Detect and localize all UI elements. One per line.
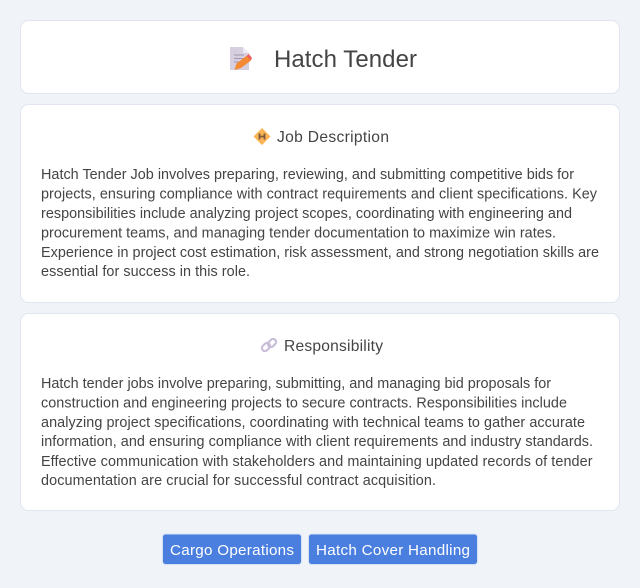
heading: responsibility: Responsibility bbox=[284, 338, 383, 355]
icon: memo and pencil bbox=[230, 47, 252, 70]
tag: hatch cover handling bbox=[308, 534, 478, 564]
text block: responsibility: construction and engineering projects to secure contracts. Responsibilities include bbox=[41, 396, 567, 412]
text block: job description: Hatch Tender Job involves preparing, reviewing, and submitting competitive bids for bbox=[41, 167, 574, 183]
text block: responsibility: analyzing project specifications, coordinating with technical teams to gather accurate bbox=[41, 415, 585, 431]
panel: title card bbox=[20, 20, 620, 94]
text block: job description: Experience in project cost estimation, risk assessment, and strong negotiation skills are bbox=[41, 245, 599, 261]
tag: cargo operations bbox=[162, 534, 302, 564]
icon: orange diamond sign bbox=[254, 129, 270, 144]
tag: hatch cover handling: Hatch Cover Handling bbox=[316, 542, 470, 559]
text block: job description: projects, ensuring compliance with contract requirements and client specifications. Key bbox=[41, 186, 598, 202]
text block: responsibility bbox=[41, 376, 593, 489]
text block: job description: procurement teams, and managing tender documentation to maximize win rates. bbox=[41, 226, 556, 242]
heading: job description: Job Description bbox=[277, 129, 389, 146]
text block: job description: essential for success in this role. bbox=[41, 264, 250, 280]
tag: cargo operations: Cargo Operations bbox=[170, 542, 294, 559]
text block: responsibility: Effective communication with stakeholders and maintaining updated records of tender bbox=[41, 454, 593, 470]
icon: chain link bbox=[261, 338, 277, 352]
text block: job description bbox=[41, 167, 599, 280]
panel: job description bbox=[20, 104, 620, 302]
text block: responsibility: Hatch tender jobs involve preparing, submitting, and managing bid proposals for bbox=[41, 376, 551, 392]
text block: responsibility: documentation are crucial for successful contract acquisition. bbox=[41, 473, 436, 489]
text block: job description: responsibilities include analyzing project scopes, coordinating with engineering and bbox=[41, 206, 572, 222]
title: Hatch Tender bbox=[274, 46, 417, 73]
panel: responsibility bbox=[20, 314, 620, 510]
text block: responsibility: information, and ensuring compliance with client requirements and industry standards. bbox=[41, 434, 593, 450]
